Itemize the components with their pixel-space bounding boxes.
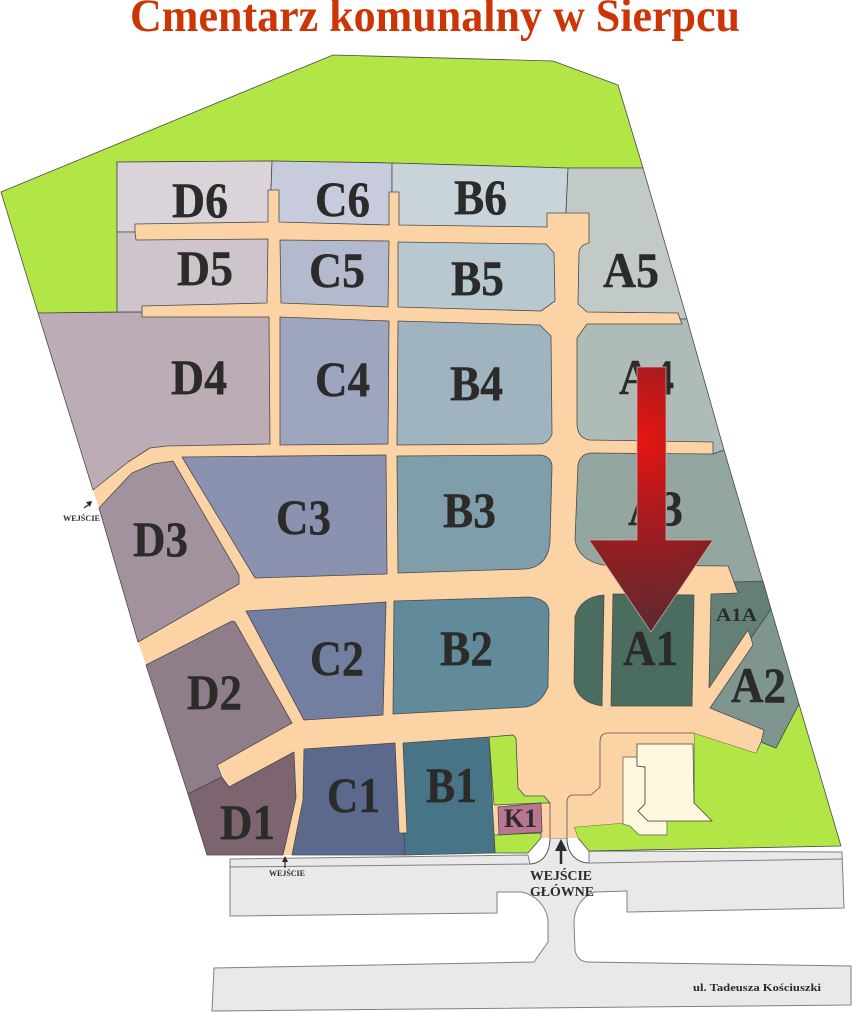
road network [93,190,764,855]
chapel building [623,744,712,835]
section B3 [397,455,552,573]
main entrance: WEJŚCIE [530,868,592,883]
section C3: C3 [276,489,331,545]
section A1A: A1A [716,605,757,626]
side entrance west [63,501,100,523]
section A1 [574,594,694,706]
section A4 [577,319,724,454]
section B3: B3 [443,482,496,538]
section A3 [575,450,763,582]
section C1: C1 [327,767,380,823]
section A3: A3 [628,480,683,536]
section D3: D3 [133,511,188,567]
section C6: C6 [315,171,370,227]
section D5 [117,232,268,312]
side entrance south [269,856,305,878]
section C1 [292,743,405,855]
section C5 [280,240,389,307]
section A4: A4 [619,349,674,405]
section D4 [38,312,270,490]
section B6 [392,163,568,227]
section D5: D5 [177,240,233,296]
section B1: B1 [426,757,477,813]
section D3 [99,461,239,642]
main entrance: GŁÓWNE [530,884,594,899]
side entrance south: WEJŚCIE [269,868,305,878]
section B5: B5 [451,250,504,306]
section D6 [117,161,272,232]
section K1 [498,803,542,835]
section A1: A1 [623,620,678,676]
side entrance west: WEJŚCIE [63,513,100,523]
section A1A [709,581,771,688]
section A5 [566,168,687,319]
street name: ul. Tadeusza Kościuszki [693,982,821,994]
section B4: B4 [450,355,503,411]
section D6: D6 [172,172,228,228]
main entrance [530,839,594,899]
section B4 [397,321,552,445]
section D2: D2 [187,664,242,720]
section A2: A2 [731,657,786,713]
section C2 [246,602,386,720]
section B2 [393,597,549,714]
section D4: D4 [171,349,227,405]
section C4: C4 [315,351,370,407]
section C2: C2 [310,630,364,686]
section C4 [280,317,389,445]
section K1: K1 [504,804,537,833]
section B1 [403,737,495,855]
section A5: A5 [603,242,659,298]
section B6: B6 [454,169,507,225]
section C6 [271,161,392,227]
section C5: C5 [309,242,365,298]
section A2 [710,609,799,748]
section D1: D1 [220,794,275,850]
red arrow [589,367,713,632]
section D1 [188,752,296,855]
section C3 [182,455,387,578]
green areas [1,55,841,851]
section B2: B2 [440,620,493,676]
section D2 [146,621,292,794]
street: ul. Tadeusza Kościuszki [212,838,851,1011]
section B5 [398,242,555,311]
green patch near K1 [489,735,550,853]
main entrance road outlines [530,733,694,864]
